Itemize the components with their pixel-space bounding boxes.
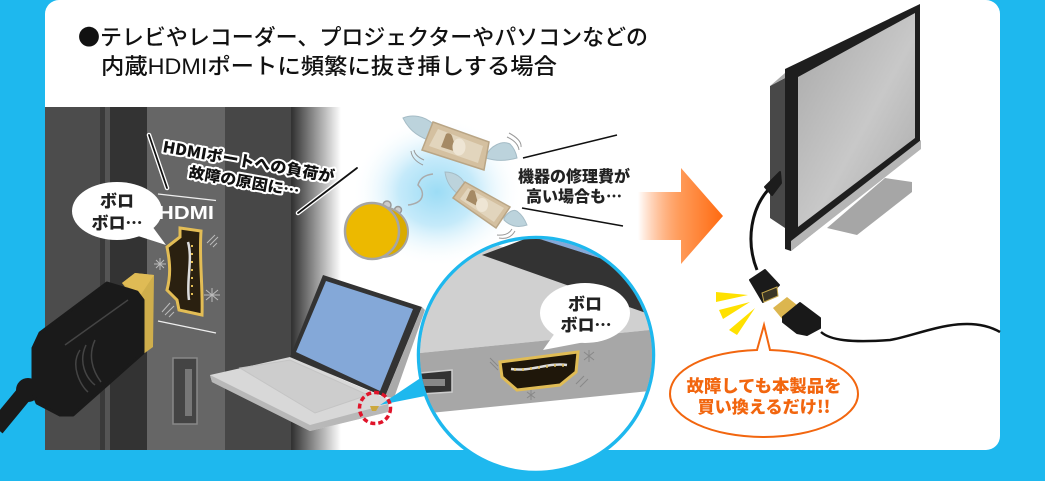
speech bubble: ボロボロ close-up: ボロ — [568, 290, 602, 315]
HDMI connector and cable — [773, 297, 1000, 341]
magnifier: laptop port close-up — [400, 236, 660, 472]
caption: HDMI port load: HDMIポートへの負荷が — [161, 135, 337, 187]
speech bubble: ボロボロ: ボロ… — [92, 209, 142, 234]
title — [78, 20, 648, 79]
icon: damaged HDMI port close-up — [490, 350, 594, 400]
icon: monitor — [770, 4, 921, 251]
icon: spark lines — [716, 292, 755, 335]
speech bubble: ボロボロ close-up — [540, 283, 630, 350]
title: 内蔵HDMIポートに頻繁に抜き挿しする場合 — [101, 54, 557, 79]
callout: just replace the product: 買い換えるだけ!! — [698, 393, 830, 418]
icon: laptop — [210, 275, 425, 431]
caption: HDMI port load — [149, 135, 357, 213]
HDMI logo and divider lines — [158, 194, 216, 333]
cable and adapter — [750, 172, 781, 302]
icon: flying banknote 2 — [445, 172, 527, 238]
callout: just replace the product — [670, 325, 858, 437]
icon: coin purse — [345, 174, 433, 259]
panel: TV side with HDMI port — [45, 107, 341, 450]
blue glow — [352, 117, 522, 267]
icon: USB port — [173, 358, 197, 424]
speech bubble: ボロボロ close-up: ボロ… — [560, 311, 612, 336]
caption: repair cost: 高い場合も… — [526, 183, 622, 207]
icon: flying banknote 1 — [403, 116, 521, 170]
arrow — [638, 168, 723, 264]
caption: HDMI port load: 故障の原因に… — [187, 161, 301, 201]
title: ●テレビやレコーダー、プロジェクターやパソコンなどの — [78, 20, 648, 52]
caption: repair cost — [518, 135, 630, 226]
zoom callout wedge — [380, 375, 430, 405]
callout: just replace the product: 故障しても本製品を — [686, 372, 842, 397]
speech bubble: ボロボロ: ボロ — [100, 187, 134, 212]
HDMI plug — [0, 273, 154, 428]
speech bubble: ボロボロ — [72, 182, 166, 245]
caption: repair cost: 機器の修理費が — [518, 163, 630, 187]
icon: damaged HDMI port — [154, 228, 220, 317]
HDMI logo and divider lines: HDMI — [158, 203, 214, 223]
dashed circle highlight — [360, 392, 390, 424]
